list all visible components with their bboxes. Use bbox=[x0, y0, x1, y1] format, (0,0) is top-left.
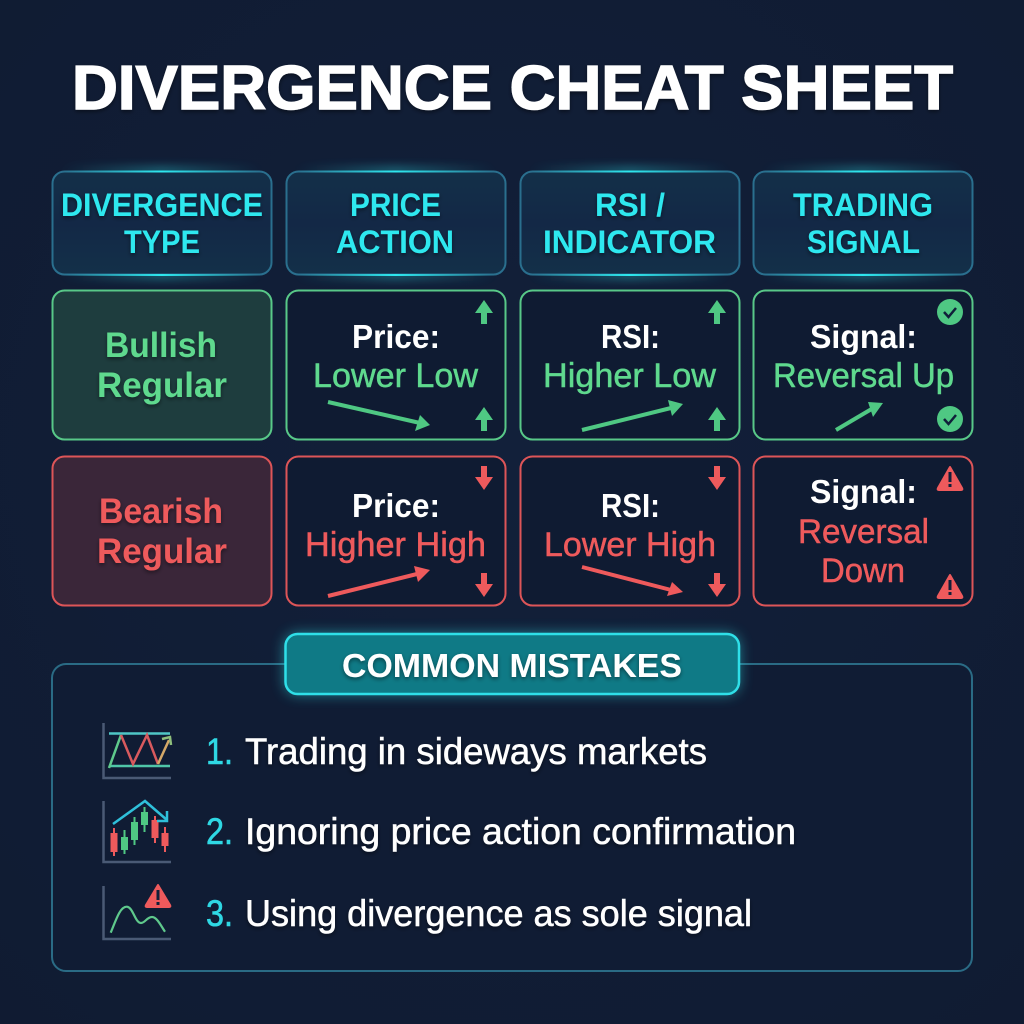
item 1 bbox=[104, 723, 707, 778]
header: trading signal: SIGNAL bbox=[807, 224, 920, 260]
cell: price higher high: Price: bbox=[352, 487, 440, 524]
cell: rsi lower high: RSI: bbox=[601, 487, 660, 524]
item 1: Trading in sideways markets bbox=[245, 731, 707, 772]
header: divergence type: DIVERGENCE bbox=[61, 187, 263, 223]
icon: up arrow top bbox=[708, 300, 726, 324]
header: divergence type bbox=[52, 168, 272, 278]
cell: signal reversal down: Reversal bbox=[798, 513, 929, 551]
header: price action bbox=[286, 168, 506, 278]
header: price action: ACTION bbox=[336, 224, 454, 260]
cell: price lower low: Lower Low bbox=[313, 357, 478, 395]
cell: price lower low bbox=[286, 290, 506, 440]
header: rsi indicator: RSI / bbox=[595, 187, 665, 223]
item 3: 3. bbox=[206, 893, 233, 934]
header: divergence type: TYPE bbox=[124, 224, 200, 260]
cell: bullish regular bbox=[52, 290, 272, 440]
bearish row bbox=[52, 456, 972, 606]
cell: rsi lower high bbox=[520, 456, 740, 606]
item 3: Using divergence as sole signal bbox=[245, 893, 752, 934]
icon: warning bottom bbox=[938, 575, 962, 598]
icon: candlestick chart bbox=[104, 801, 171, 862]
cell: signal reversal up: Signal: bbox=[810, 318, 917, 355]
item 1: 1. bbox=[206, 731, 233, 772]
icon: curve with warning bbox=[104, 885, 171, 939]
icon: down arrow bottom bbox=[475, 573, 493, 597]
panel: common mistakes bbox=[52, 634, 972, 971]
cell: signal reversal down: Down bbox=[821, 552, 905, 590]
cell: signal reversal up: Reversal Up bbox=[773, 357, 954, 395]
bullish row bbox=[52, 290, 972, 440]
item 2: 2. bbox=[206, 811, 233, 852]
header: trading signal: TRADING bbox=[793, 187, 933, 223]
arrow: reversal up bbox=[836, 402, 883, 430]
item 3 bbox=[104, 885, 752, 939]
cell: bearish regular bbox=[52, 456, 272, 606]
icon: check top bbox=[937, 299, 963, 325]
header: rsi indicator bbox=[520, 168, 740, 278]
item 2 bbox=[104, 801, 796, 862]
cell: rsi lower high: Lower High bbox=[544, 526, 716, 564]
heading: common mistakes bbox=[285, 634, 739, 694]
header: price action: PRICE bbox=[350, 187, 441, 223]
cell: signal reversal down bbox=[754, 456, 972, 606]
icon: warning top bbox=[938, 467, 962, 490]
icon: sideways market chart bbox=[104, 723, 171, 778]
header: rsi indicator: INDICATOR bbox=[543, 224, 716, 260]
arrow: falling rsi line bbox=[582, 567, 683, 596]
cell: bearish regular: Bearish bbox=[99, 492, 223, 531]
icon: check bottom bbox=[937, 406, 963, 432]
cell: rsi higher low bbox=[520, 290, 740, 440]
cell: bullish regular: Bullish bbox=[105, 326, 217, 365]
cell: rsi higher low: Higher Low bbox=[543, 357, 716, 395]
cell: price lower low: Price: bbox=[352, 318, 440, 355]
icon: down arrow top bbox=[475, 466, 493, 490]
cell: signal reversal down: Signal: bbox=[810, 473, 917, 510]
heading: common mistakes: COMMON MISTAKES bbox=[342, 647, 682, 684]
cell: rsi higher low: RSI: bbox=[601, 318, 660, 355]
title: DIVERGENCE CHEAT SHEET bbox=[72, 54, 953, 123]
item 2: Ignoring price action confirmation bbox=[245, 811, 796, 852]
header: trading signal bbox=[754, 168, 972, 278]
icon: up arrow bottom bbox=[708, 407, 726, 431]
icon: down arrow bottom bbox=[708, 573, 726, 597]
arrow: falling price line bbox=[328, 402, 430, 431]
cell: price higher high bbox=[286, 456, 506, 606]
arrow: rising rsi line bbox=[582, 400, 683, 430]
icon: up arrow bottom bbox=[475, 407, 493, 431]
icon: up arrow top bbox=[475, 300, 493, 324]
cell: price higher high: Higher High bbox=[305, 526, 486, 564]
arrow: rising price line bbox=[328, 566, 430, 596]
cell: signal reversal up bbox=[754, 290, 972, 440]
icon: down arrow top bbox=[708, 466, 726, 490]
cell: bearish regular: Regular bbox=[97, 532, 227, 571]
cell: bullish regular: Regular bbox=[97, 366, 227, 405]
header row bbox=[52, 168, 972, 278]
